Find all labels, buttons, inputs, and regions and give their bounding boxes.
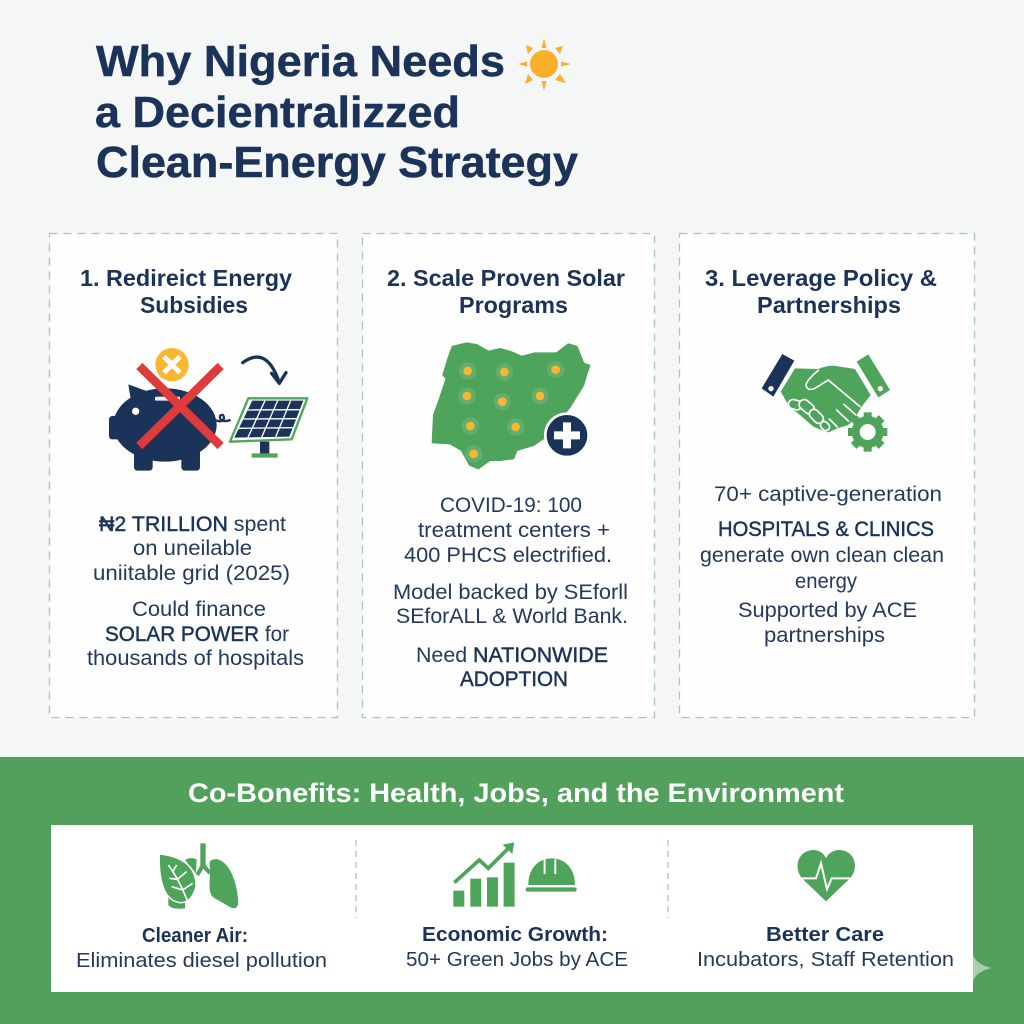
text: policy facts: generate own clean clean [700, 544, 944, 567]
heading: card 1: 1. Redireict Energy [80, 265, 292, 291]
text: policy facts: Supported by ACE [738, 599, 917, 622]
text: economic growth: 50+ Green Jobs by ACE [406, 948, 628, 971]
decorative tab [973, 955, 992, 981]
text: policy facts: HOSPITALS & CLINICS [718, 518, 934, 541]
text: solar program facts: Model backed by SEforll [393, 581, 628, 604]
heading: card 1 [80, 265, 292, 318]
panel: scale proven solar programs [362, 234, 654, 718]
text: policy facts: energy [795, 570, 857, 593]
title: Why Nigeria Needs [96, 37, 505, 86]
white benefits panel [51, 825, 973, 992]
text: cleaner air: Eliminates diesel pollution [76, 949, 327, 972]
text: economic growth [406, 923, 628, 971]
text: subsidy facts: thousands of hospitals [87, 647, 304, 670]
heading: card 3: Partnerships [757, 292, 901, 318]
title: Clean-Energy Strategy [96, 138, 579, 187]
text: solar program facts: 400 PHCS electrified. [404, 544, 612, 567]
panel: redirect energy subsidies [50, 234, 338, 718]
heading: card 2: 2. Scale Proven Solar [387, 265, 625, 291]
text: subsidy facts: Could finance [132, 598, 266, 621]
heading: card 2: Programs [459, 292, 568, 318]
heading: card 2 [387, 265, 625, 318]
text: subsidy facts: ₦2 TRILLION spent [99, 513, 286, 536]
text: solar program facts: SEforALL & World Bank. [396, 605, 628, 628]
text: solar program facts [393, 494, 628, 691]
heading: card 1: Subsidies [140, 292, 248, 318]
heading: co-benefits: Co-Bonefits: Health, Jobs, and the Environment [188, 778, 844, 808]
text: policy facts: partnerships [764, 624, 885, 647]
text: better care [697, 923, 954, 971]
text: policy facts: 70+ captive-generation [714, 483, 942, 506]
panel: leverage policy and partnerships [680, 234, 974, 718]
icon: Nigeria map with solar sites [433, 343, 589, 468]
text: subsidy facts [87, 513, 304, 670]
icon: handshake and gear [762, 354, 890, 452]
text: solar program facts: COVID-19: 100 [440, 494, 582, 517]
icon: leaf and lungs [159, 843, 238, 909]
title: a Decientralizzed [95, 88, 460, 137]
text: better care: Incubators, Staff Retention [697, 948, 954, 971]
panel: co-benefits band [0, 757, 1024, 1024]
text: policy facts [700, 483, 944, 647]
heading: card 3: 3. Leverage Policy & [705, 265, 937, 291]
text: subsidy facts: on uneilable [133, 537, 252, 560]
text: cleaner air [76, 924, 327, 972]
text: solar program facts: Need NATIONWIDE [416, 644, 608, 667]
icon: heart with pulse [798, 850, 855, 901]
text: solar program facts: ADOPTION [460, 668, 568, 691]
title [95, 37, 579, 187]
text: subsidy facts: SOLAR POWER for [105, 623, 289, 646]
text: better care: Better Care [766, 923, 884, 946]
icon: crossed-out piggy bank and solar panel [109, 348, 307, 471]
text: economic growth: Economic Growth: [422, 923, 608, 946]
icon: sun [518, 38, 571, 91]
text: cleaner air: Cleaner Air: [142, 924, 248, 947]
icon: growth chart and hard hat [453, 842, 577, 907]
heading: card 3 [705, 265, 937, 318]
text: subsidy facts: uniitable grid (2025) [93, 562, 290, 585]
text: solar program facts: treatment centers + [418, 519, 610, 542]
